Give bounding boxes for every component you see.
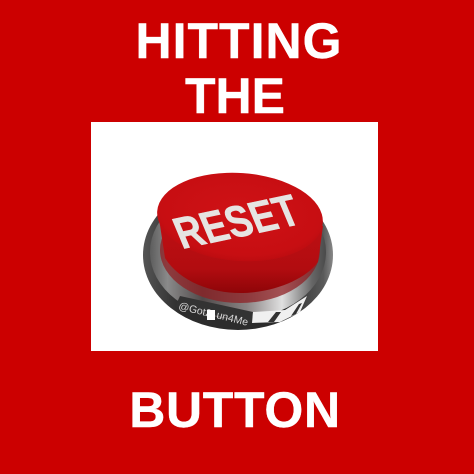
red button top <box>154 167 326 267</box>
title: HITTING: HITTING <box>136 13 342 69</box>
chrome base ring <box>143 180 333 330</box>
watermark bar <box>175 296 307 329</box>
title: THE: THE <box>185 68 285 124</box>
title: BUTTON: BUTTON <box>129 382 341 438</box>
RESET label: RESET <box>166 185 307 258</box>
panel: white image background <box>91 122 378 351</box>
watermark text: @Got2 <box>177 300 213 320</box>
red button side <box>154 167 326 293</box>
watermark bar: un4Me <box>215 309 249 329</box>
redaction patch <box>207 310 215 320</box>
